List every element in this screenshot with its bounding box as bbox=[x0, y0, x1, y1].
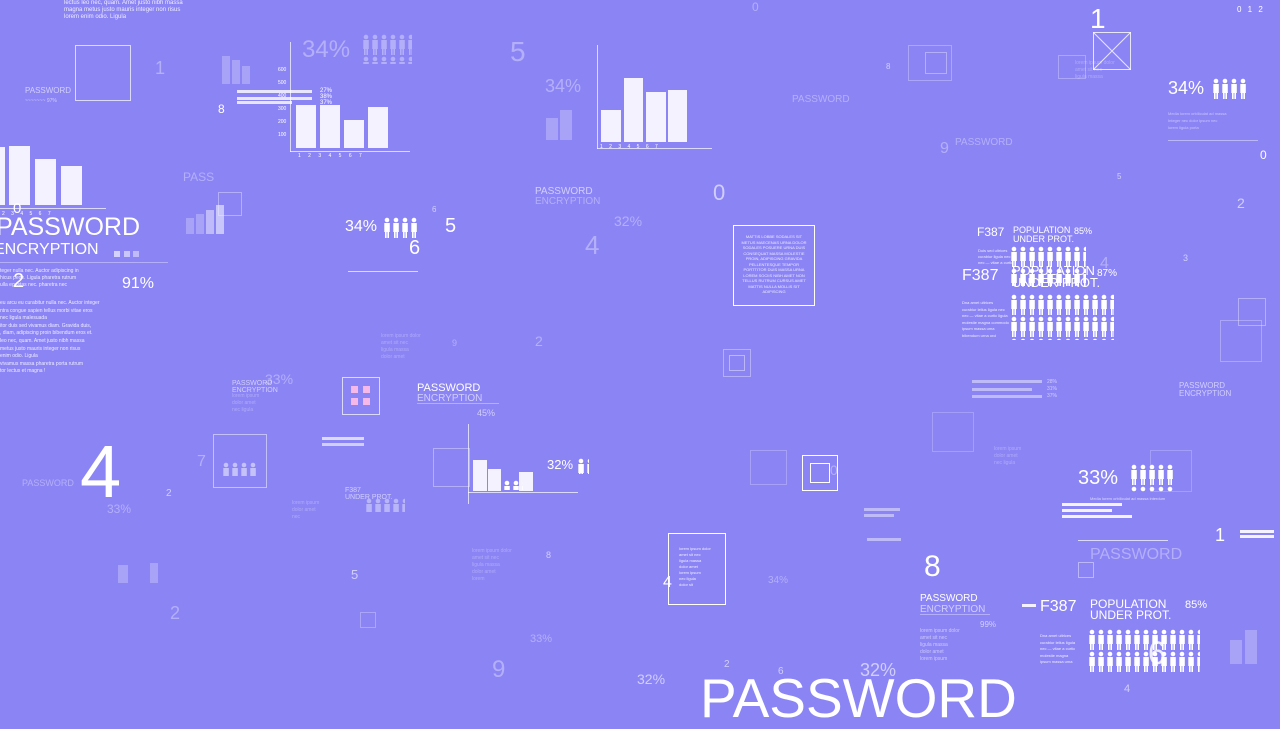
text: Duis sed ultrices bbox=[978, 248, 1007, 253]
top-right items: 1 bbox=[1090, 3, 1106, 34]
lower center scattered: F387 bbox=[345, 487, 361, 494]
text block: left body: hicus pede. Ligula pharetra rutrum bbox=[0, 275, 76, 281]
text: 8 bbox=[546, 550, 551, 560]
panel: population under protection (lower right): F387 bbox=[1040, 598, 1076, 615]
text: 8 bbox=[886, 62, 890, 71]
text: nec ligula malesuada bbox=[0, 315, 47, 321]
text: 6 bbox=[432, 205, 436, 214]
text: 34% bbox=[768, 575, 788, 586]
text box: center framed: PROIN, ADIPISCING GRAVIDA bbox=[746, 256, 802, 261]
text: 1 bbox=[155, 58, 165, 78]
text: 2 bbox=[13, 270, 24, 292]
text box: lower center: lorem ipsum bbox=[679, 570, 701, 575]
text: PASSWORD bbox=[22, 478, 74, 488]
decorative squares right bbox=[1238, 298, 1266, 326]
heading: big PASSWORD bottom: PASSWORD bbox=[700, 667, 1017, 729]
text: dolor amet bbox=[994, 453, 1018, 459]
text: 1 bbox=[1215, 525, 1225, 545]
text box: center framed: ADIPISCING bbox=[762, 289, 786, 294]
text: dolor amet bbox=[381, 354, 405, 360]
text box: center framed: METUS MAECENAS URNA DOLOR bbox=[741, 240, 807, 244]
text: PASSWORD bbox=[1090, 546, 1182, 563]
frame: top-left square bbox=[75, 45, 131, 101]
text: 2 bbox=[724, 659, 730, 670]
small faint chart with X box bbox=[218, 192, 242, 216]
panel: population under protection (upper right): nec — vitae a curtic ligula bbox=[962, 313, 1008, 318]
text: 7 bbox=[197, 453, 206, 470]
text: 2 bbox=[170, 603, 180, 623]
panel: password encryption 45% chart: PASSWORD bbox=[417, 382, 480, 394]
panel: password encryption 99%: lorem ipsum bbox=[920, 656, 947, 662]
text: nec bbox=[292, 514, 300, 520]
panel: password encryption 99%: dolor amet bbox=[920, 649, 944, 655]
stat: 34% top-right: lorem ligula porta bbox=[1168, 125, 1199, 130]
stat: 34% with figures center-left: 34% bbox=[345, 218, 377, 235]
text: 32% bbox=[614, 213, 642, 229]
text: 31% bbox=[1047, 386, 1057, 392]
text: itor duis sed vivamus diam. Gravida duis, bbox=[0, 323, 91, 329]
stat: 33% right with bars: Media lorem orbiliculat ad massa interdum bbox=[1090, 496, 1165, 501]
panel: population under protection (upper right): UNDER PROT. bbox=[1012, 275, 1100, 290]
text: 33% bbox=[107, 502, 131, 516]
text: 0 bbox=[13, 200, 21, 217]
text: enim odio. Ligula bbox=[0, 353, 38, 359]
label: password encryption faint center: ENCRYPTION bbox=[535, 196, 600, 207]
text: metus justo mauris integer non risus bbox=[0, 346, 80, 352]
text box: center framed: TELLUS RUTRUM CURSUS AMET bbox=[742, 278, 806, 283]
mid-left cluster bbox=[232, 380, 278, 394]
text: vivamus massa pharetra porta rutrum bbox=[0, 361, 83, 367]
text box: center framed: CONSEQUAT MASSA MOLESTIE bbox=[743, 250, 805, 256]
text block: top-left bbox=[64, 0, 183, 20]
label: password small bbox=[25, 86, 71, 104]
text box: center framed: MATTIS LOBBE SODALES SIT bbox=[746, 234, 802, 239]
text box: center framed: LOREM SOCIIS NIBH AMET NON bbox=[743, 272, 805, 278]
panel: population under protection (upper right): bibendum urna orci bbox=[962, 332, 996, 338]
lower center scattered bbox=[345, 487, 392, 501]
text: 6 bbox=[778, 666, 784, 677]
text: amet sit nec bbox=[472, 555, 499, 561]
text box: lower center: ligula massa bbox=[679, 558, 701, 563]
text: 4 bbox=[1100, 255, 1109, 272]
label: password small: ~~~~~~~ 97% bbox=[25, 98, 57, 104]
panel: population under protection (upper right): Dna amet ultrices bbox=[962, 300, 993, 305]
stat: 34% top-right: Media lorem orbiliculat ad massa bbox=[1168, 111, 1226, 116]
text: 87% bbox=[1097, 268, 1117, 279]
text: , diam, adipiscing proin bibendum eros et. bbox=[0, 330, 93, 336]
text: 37% bbox=[1047, 393, 1057, 399]
stat: 91%: 91% bbox=[122, 275, 154, 292]
text: lorem ipsum bbox=[994, 446, 1021, 452]
text: nec ligula bbox=[232, 407, 253, 413]
chart: top-left-center bar chart: 37% bbox=[320, 100, 332, 106]
faint chart left of center bbox=[546, 118, 558, 140]
panel: population under protection (lower right) bbox=[1022, 597, 1207, 672]
text: lorem ipsum dolor bbox=[1075, 60, 1115, 66]
stat: 34% with figures center-left bbox=[345, 215, 456, 272]
panel: population under protection (lower right): molestie magna bbox=[1040, 652, 1068, 658]
panel: population under protection (lower right): POPULATION bbox=[1090, 597, 1166, 611]
chart: left edge big bars: 2 3 4 5 6 7 bbox=[2, 211, 51, 217]
text: eu arcu eu curabitur nulla nec. Auctor integer bbox=[0, 300, 100, 306]
panel: password encryption 99%: 8 bbox=[924, 550, 941, 583]
panel: population under protection (upper right) bbox=[962, 225, 1117, 340]
text: 32% bbox=[637, 671, 665, 687]
text block: left body: ulla egestas nec. pharetra nec bbox=[0, 282, 67, 288]
text: lorem ipsum bbox=[292, 500, 319, 506]
panel: population under protection (lower right): curabiur lellus ligula bbox=[1040, 640, 1075, 644]
text: ligula massa bbox=[472, 562, 500, 568]
text: amet sit nec bbox=[1075, 67, 1102, 73]
stat: 33% right with bars: 33% bbox=[1078, 467, 1118, 489]
chart: top-left-center bar chart: 200 bbox=[278, 119, 286, 125]
text box: lower center: dolor sit bbox=[679, 582, 693, 587]
mid-left cluster: PASSWORD bbox=[232, 380, 272, 387]
panel: population under protection (upper right): POPULATION bbox=[1013, 225, 1070, 235]
text: PASSWORD bbox=[792, 94, 850, 105]
label: faint 34% with figures: 34% bbox=[302, 36, 350, 63]
text: 2 bbox=[1237, 195, 1245, 211]
text: ntra congue sapien tellus morbi vitae eros bbox=[0, 308, 93, 314]
text: 4 bbox=[663, 574, 672, 591]
heading: PASSWORD ENCRYPTION left: PASSWORD bbox=[0, 213, 140, 241]
panel: password encryption 45% chart: 45% bbox=[477, 408, 495, 418]
panel: password encryption 45% chart: ENCRYPTION bbox=[417, 393, 482, 404]
text: 33% bbox=[265, 371, 293, 387]
text box: center framed: PELLENTESQUE TEMPOR bbox=[749, 262, 799, 266]
text: tor lectus et magna ! bbox=[0, 368, 45, 374]
text: 32% bbox=[860, 660, 896, 680]
text: 0 bbox=[1260, 148, 1267, 162]
stat: 33% right with bars bbox=[1062, 464, 1173, 541]
text: lorem bbox=[472, 576, 485, 582]
text block: top-left: magna metus justo mauris integer non risus bbox=[64, 7, 180, 13]
text: 4 bbox=[585, 230, 599, 260]
text box: lower center: dolor amet bbox=[679, 564, 698, 569]
text: 2 bbox=[166, 488, 172, 499]
text: 8 bbox=[218, 102, 225, 116]
stat: 34% top-right: Integer nec dolor ipsum nec bbox=[1168, 118, 1217, 123]
text: 28% bbox=[1047, 379, 1057, 385]
panel: password encryption 99%: ENCRYPTION bbox=[920, 604, 985, 615]
text: 2 bbox=[535, 333, 543, 349]
text: 34% bbox=[545, 76, 581, 96]
stat: 34% with figures center-left: 6 bbox=[409, 237, 420, 259]
label: password small: PASSWORD bbox=[25, 86, 71, 95]
text box: lower center bbox=[668, 533, 726, 605]
panel: password encryption 99%: lorem ipsum dolor bbox=[920, 628, 960, 634]
label: password encryption faint center bbox=[535, 186, 600, 207]
icon: X box bbox=[1093, 32, 1131, 70]
text block: top-left: lorem enim odio. Ligula bbox=[64, 14, 126, 20]
chart: top-left-center bar chart: 300 bbox=[278, 106, 286, 112]
panel: population under protection (upper right): curabiur lellus ligula nec bbox=[962, 306, 1005, 312]
panel: password encryption 99%: PASSWORD bbox=[920, 593, 978, 604]
text: 4 bbox=[1124, 683, 1130, 695]
panel: population under protection (upper right): F387 bbox=[962, 267, 998, 284]
panel: population under protection (lower right): ipsum massa uma bbox=[1040, 659, 1072, 664]
text: leo nec, quam. Amet justo nibh massa bbox=[0, 338, 84, 344]
lower center scattered: UNDER PROT. bbox=[345, 494, 392, 501]
text: 0 bbox=[830, 462, 838, 478]
panel: population under protection (upper right): 85% bbox=[1074, 226, 1092, 236]
panel: population under protection (upper right): ipsum massa uma bbox=[962, 326, 994, 331]
chart: top-left-center bar chart: 500 bbox=[278, 80, 286, 86]
text: lorem ipsum dolor bbox=[472, 548, 512, 554]
panel: population under protection (upper right): POPULATION bbox=[1012, 263, 1095, 278]
icon: frame with figures bbox=[213, 434, 267, 488]
text: 9 bbox=[492, 656, 505, 683]
panel: population under protection (upper right): molestie magna commodo bbox=[962, 320, 1009, 324]
text: lorem ipsum bbox=[232, 393, 259, 399]
text: 0 bbox=[752, 0, 759, 14]
panel: population under protection (lower right): Dna amet ultrices bbox=[1040, 633, 1071, 638]
text: 0 bbox=[713, 180, 725, 205]
chart: top-center bar chart bbox=[597, 45, 712, 150]
text: 0 1 2 bbox=[1237, 5, 1263, 14]
panel: password encryption 45% chart bbox=[417, 382, 589, 504]
text: 33% bbox=[530, 633, 552, 645]
panel: population under protection (upper right): F387 bbox=[977, 225, 1004, 239]
text: amet sit nec bbox=[381, 340, 408, 346]
stat: 34% with figures center-left: 5 bbox=[445, 215, 456, 237]
text: dolor amet bbox=[232, 400, 256, 406]
text box: center framed: MATTIS NULLA MOLLIS SIT bbox=[748, 284, 800, 288]
text box: lower center: lorem ipsum dolor bbox=[679, 546, 711, 551]
panel: population under protection (lower right): 85% bbox=[1185, 599, 1207, 611]
text box: lower center: nec ligula bbox=[679, 576, 696, 581]
icon: square with four dots bbox=[342, 377, 380, 415]
text box: center framed: SODALES POSUERE URNA DUIS bbox=[743, 245, 805, 250]
icon: nested squares bbox=[802, 455, 838, 491]
text: nec ligula bbox=[994, 460, 1015, 466]
text: nec — vitae a curtic bbox=[978, 260, 1013, 265]
chart: top-left-center bar chart: 600 bbox=[278, 67, 286, 73]
label: password encryption faint center: PASSWORD bbox=[535, 186, 593, 197]
text: dolor amet bbox=[472, 569, 496, 575]
text: 5 bbox=[351, 567, 358, 582]
text box: center framed: PORTTITOR DUIS MASSA URNA bbox=[744, 267, 804, 272]
text: ligula massa bbox=[381, 347, 409, 353]
mid-left cluster: ENCRYPTION bbox=[232, 387, 278, 394]
text: 9 bbox=[452, 338, 457, 348]
text: PASSWORD bbox=[1179, 381, 1225, 390]
mid-right faint bars bbox=[972, 380, 1042, 383]
text block: left body bbox=[0, 268, 79, 288]
chart: top-left-center bar chart: 400 bbox=[278, 93, 286, 99]
text block: top-left: lectus leo nec, quam. Amet justo nibh massa bbox=[64, 0, 183, 6]
chart: top-left-center bar chart: 1 2 3 4 5 6 7 bbox=[298, 153, 362, 159]
chart: top-left-center bar chart: 100 bbox=[278, 132, 286, 138]
text: ENCRYPTION bbox=[1179, 389, 1231, 398]
panel: password encryption 99% bbox=[920, 550, 996, 662]
text block: left body: teger nulla nec. Auctor adipiscing in bbox=[0, 268, 79, 274]
chart: top-center bar chart: 1 2 3 4 5 6 7 bbox=[600, 144, 658, 150]
text: 9 bbox=[940, 140, 949, 157]
panel: population under protection (upper right): UNDER PROT. bbox=[1013, 234, 1074, 244]
text box: lower center: amet sit nec bbox=[679, 552, 701, 557]
chart: top-left-center bar chart: 27% bbox=[320, 88, 332, 94]
panel: password encryption 99%: 99% bbox=[980, 620, 996, 629]
chart: top-left-center bar chart bbox=[237, 42, 410, 159]
big number 4: 4 bbox=[80, 430, 121, 513]
panel: population under protection (lower right): 6 bbox=[1148, 635, 1166, 671]
panel: population under protection (lower right): UNDER PROT. bbox=[1090, 608, 1171, 622]
text: ligula massa bbox=[1075, 74, 1103, 80]
stat: 34% top-right: 34% bbox=[1168, 78, 1204, 98]
text: 5 bbox=[510, 36, 526, 67]
chart: left edge big bars bbox=[0, 146, 106, 217]
panel: password encryption 99%: ligula massa bbox=[920, 642, 948, 648]
text: 3 bbox=[1183, 253, 1188, 263]
stat: 34% top-right bbox=[1168, 78, 1258, 141]
text box: center framed bbox=[733, 225, 815, 306]
panel: population under protection (lower right): nec — vitae a curtic bbox=[1040, 646, 1075, 651]
text: dolor amet bbox=[292, 507, 316, 513]
text: 5 bbox=[1117, 172, 1121, 181]
text: lorem ipsum dolor bbox=[381, 333, 421, 339]
text: PASS bbox=[183, 170, 214, 184]
chart: top-left-center bar chart: 38% bbox=[320, 94, 332, 100]
text: PASSWORD bbox=[955, 137, 1013, 148]
text: curabiur ligula nec bbox=[978, 254, 1010, 259]
panel: password encryption 99%: amet sit nec bbox=[920, 635, 947, 641]
panel: password encryption 45% chart: 32% bbox=[547, 457, 573, 472]
